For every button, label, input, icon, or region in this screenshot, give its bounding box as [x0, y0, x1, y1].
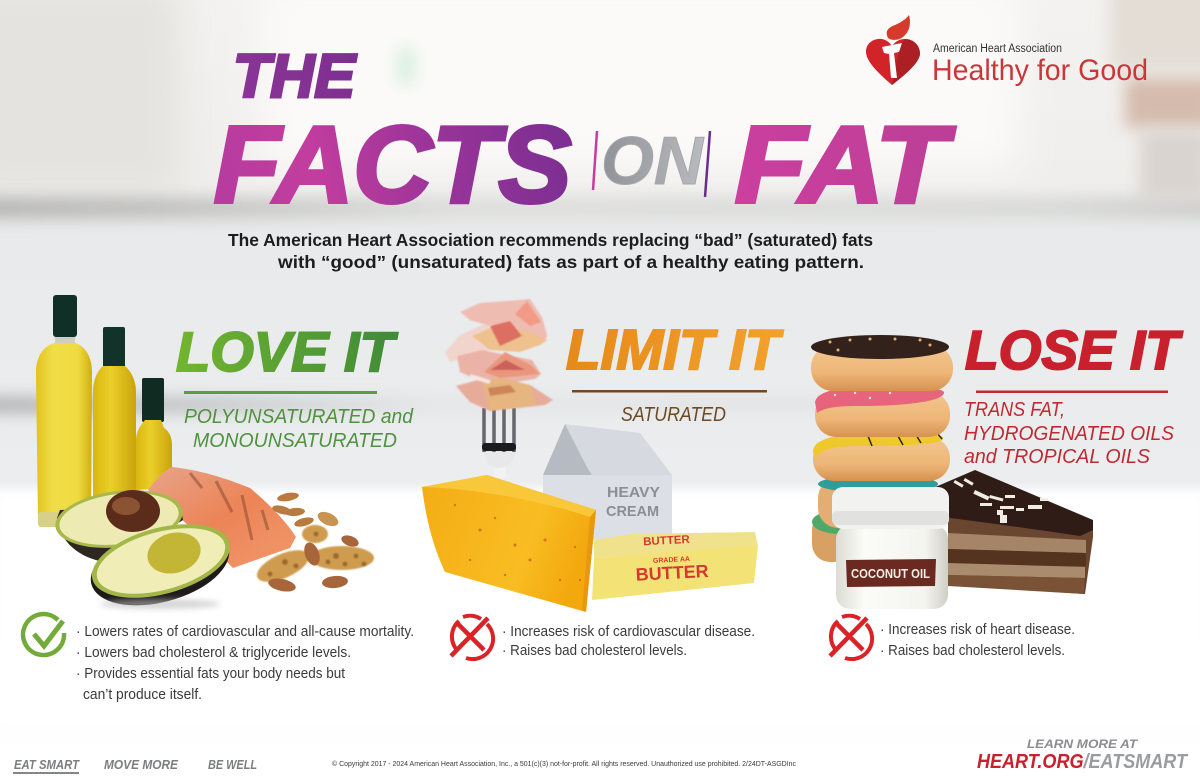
footer navigation [13, 758, 257, 774]
footer navigation: EAT SMART [14, 758, 80, 772]
copyright: © Copyright 2017 - 2024 American Heart Association, Inc., a 501(c)(3) not-for-profit. All rights reserved. Unauthorized use prohibited. 2/24DT-ASGDInc [332, 760, 796, 768]
benefits list: can’t produce itself. [83, 687, 202, 703]
image: salmon [148, 467, 296, 568]
title [214, 42, 955, 226]
panel: love it [23, 295, 414, 703]
image: coconut oil jar [832, 487, 949, 609]
risks list: · Raises bad cholesterol levels. [502, 643, 687, 659]
intro text: The American Heart Association recommends replacing “bad” (saturated) fats [228, 230, 873, 250]
image: avocado halves [52, 483, 238, 619]
carton label: HEAVY [607, 484, 660, 501]
intro text: with “good” (unsaturated) fats as part of a healthy eating pattern. [277, 252, 864, 272]
panel: limit it [422, 299, 784, 659]
risks list: · Increases risk of cardiovascular disease. [502, 624, 755, 640]
image: butter stick [592, 532, 758, 600]
icon: cross mark [830, 616, 872, 659]
footer navigation: MOVE MORE [104, 758, 179, 772]
image: cheese wedge [422, 475, 596, 612]
title word: FACTS: FACTS [214, 104, 571, 226]
risks list [502, 624, 755, 659]
carton label [606, 484, 660, 520]
image: donut stack [811, 335, 953, 562]
subheading: trans fat, hydrogenated and tropical oils: and TROPICAL OILS [964, 446, 1151, 468]
learn more link: HEART.ORG/EATSMART [977, 751, 1189, 773]
heading: LIMIT IT: LIMIT IT [566, 318, 784, 381]
heading: LOSE IT: LOSE IT [965, 319, 1183, 381]
title word: ON with slashes: ON [601, 123, 705, 199]
logo wordmark: Healthy for Good [932, 54, 1148, 87]
benefits list: · Provides essential fats your body needs but [76, 666, 345, 682]
subheading: saturated: SATURATED [621, 404, 726, 426]
intro text [228, 230, 873, 272]
image: nuts [253, 491, 374, 594]
risks list [880, 622, 1075, 659]
risks list: · Raises bad cholesterol levels. [880, 643, 1065, 659]
image: butter stick: GRADE AA [653, 556, 690, 565]
heading: LOVE IT: LOVE IT [176, 320, 399, 383]
panel: lose it [811, 319, 1183, 659]
subheading: polyunsaturated and monounsaturated [184, 406, 414, 452]
logo: American Heart Association Healthy for Good [866, 15, 1148, 87]
icon: heart and torch [866, 15, 920, 85]
icon: cross mark [451, 616, 493, 659]
subheading: trans fat, hydrogenated and tropical oils [964, 399, 1175, 468]
subheading: trans fat, hydrogenated and tropical oils: HYDROGENATED OILS [964, 423, 1175, 445]
risks list: · Increases risk of heart disease. [880, 622, 1075, 638]
subheading: polyunsaturated and monounsaturated: MONOUNSATURATED [193, 430, 397, 452]
subheading: trans fat, hydrogenated and tropical oils: TRANS FAT, [964, 399, 1065, 421]
title word: FAT: FAT [735, 104, 955, 225]
logo text: American Heart Association [933, 43, 1062, 55]
benefits list: · Lowers rates of cardiovascular and all-cause mortality. [76, 624, 414, 640]
learn more link: LEARN MORE AT [1027, 737, 1139, 751]
image: oil bottles [36, 295, 172, 527]
learn more link [977, 737, 1189, 773]
benefits list: · Lowers bad cholesterol & triglyceride levels. [76, 645, 351, 661]
image: butter stick: BUTTER [643, 534, 691, 548]
benefits list [76, 624, 414, 703]
image: heavy cream carton [543, 424, 672, 540]
jar label: COCONUT OIL [851, 566, 930, 581]
footer navigation: BE WELL [208, 758, 257, 772]
icon: check mark [23, 614, 64, 655]
subheading: polyunsaturated and monounsaturated: POLYUNSATURATED and [184, 406, 414, 428]
title word: THE: THE [233, 42, 357, 110]
image: butter stick: BUTTER [635, 561, 709, 585]
image: fork with meat [445, 299, 553, 478]
image: cake slice [933, 470, 1093, 594]
carton label: CREAM [606, 503, 659, 520]
